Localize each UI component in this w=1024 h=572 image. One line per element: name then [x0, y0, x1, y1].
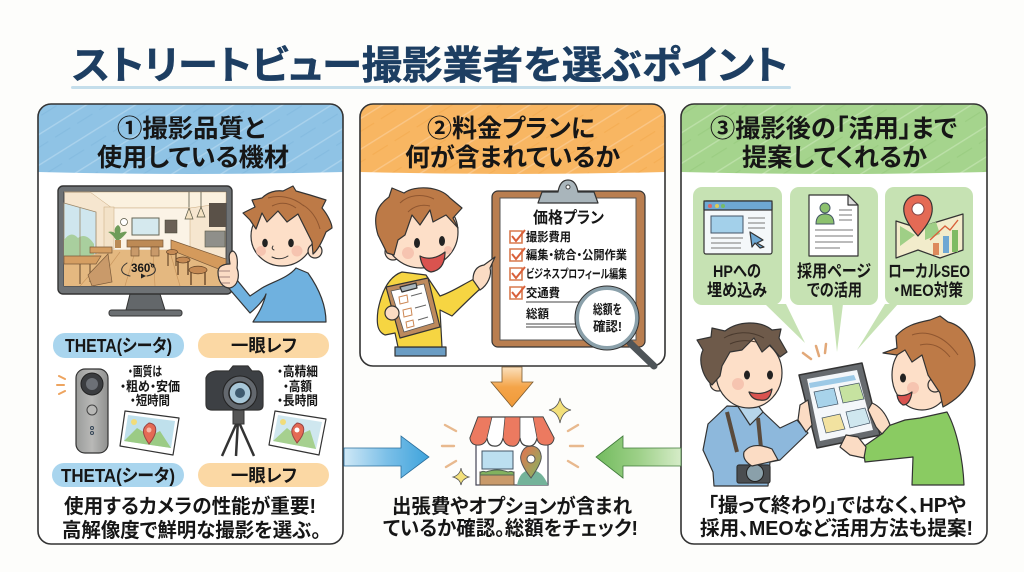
bubble: local SEO / MEO: ローカルSEO — [888, 262, 970, 281]
icon: store with map pin — [470, 417, 554, 485]
icon: browser — [704, 201, 772, 254]
header: panel 1: 使用している機材 — [97, 144, 289, 172]
icon: document — [809, 195, 858, 256]
tablet — [798, 363, 880, 448]
arrow: orange down — [491, 367, 533, 407]
caption: panel 1 — [62, 494, 321, 542]
price plan clipboard: 価格プラン — [533, 208, 605, 227]
header: panel 3: ③撮影後の「活用」まで — [710, 115, 957, 143]
price plan checklist: 撮影費用 — [526, 229, 571, 244]
icon: SLR on tripod — [206, 366, 263, 456]
price plan checklist: 交通費 — [526, 285, 560, 300]
caption: panel 2: ているか確認。総額をチェック! — [383, 517, 638, 540]
magnifier: confirm total: 総額を — [593, 302, 622, 317]
icon: photo with pin 2 — [269, 411, 326, 455]
header: panel 2: ②料金プランに — [427, 115, 595, 143]
sparkles and rays — [442, 398, 583, 485]
panel: 3 proposals — [681, 104, 987, 544]
monitor with 360 cafe view: 360° — [131, 261, 155, 275]
header: panel 1: ①撮影品質と — [117, 115, 265, 143]
caption: panel 3: 「撮って終わり」ではなく、HPや — [708, 494, 966, 517]
icon: photo with pin 1 — [120, 411, 179, 455]
SLR traits: ・長時間 — [277, 393, 318, 408]
THETA traits: ・粗め・安価 — [120, 379, 180, 394]
price plan clipboard — [492, 180, 645, 347]
magnifier: confirm total: 確認! — [593, 319, 622, 334]
caption: panel 3: 採用、MEOなど活用方法も提案! — [700, 517, 973, 540]
price plan clipboard: 総額 — [526, 306, 549, 321]
panel: 1 shooting quality and equipment — [38, 104, 343, 544]
label pill: SLR top: 一眼レフ — [231, 336, 297, 356]
bubble: HP embedding: 埋め込み — [707, 281, 767, 300]
caption: panel 2 — [383, 494, 638, 540]
arrow: green left — [596, 436, 681, 478]
label pill: SLR top — [198, 333, 329, 358]
bubble: HP embedding — [693, 187, 805, 343]
header: panel 2 — [360, 104, 665, 174]
caption: panel 1: 高解像度で鮮明な撮影を選ぶ。 — [62, 519, 321, 542]
THETA traits — [120, 364, 180, 408]
label pill: SLR bottom — [198, 463, 329, 487]
SLR traits — [277, 364, 318, 408]
icon: THETA camera — [57, 369, 108, 453]
emphasis ticks — [803, 344, 826, 359]
bubble: recruitment page: での活用 — [807, 281, 862, 300]
bubble: recruitment page: 採用ページ — [797, 262, 871, 281]
SLR traits: ・高精細 — [277, 364, 318, 379]
price plan checklist — [510, 229, 627, 300]
caption: panel 3 — [700, 494, 973, 540]
price plan checklist: 編集・統合・公開作業 — [526, 247, 627, 262]
header: panel 3 — [681, 104, 987, 174]
caption: panel 2: 出張費やオプションが含まれ — [392, 494, 632, 518]
THETA traits: ・画質は — [128, 364, 162, 379]
icon: map with pin and chart — [896, 195, 963, 258]
label pill: THETA top: THETA(シータ) — [65, 336, 172, 356]
header: panel 1 — [38, 104, 343, 174]
magnifier: confirm total — [575, 286, 654, 366]
caption: panel 1: 使用するカメラの性能が重要! — [64, 494, 316, 518]
label pill: THETA bottom: THETA(シータ) — [61, 466, 175, 486]
header: panel 2: 何が含まれているか — [405, 143, 620, 172]
title: ストリートビュー撮影業者を選ぶポイント — [72, 45, 788, 88]
client boy — [840, 316, 975, 485]
panel: 2 price plan — [360, 104, 665, 366]
bubble: local SEO / MEO: ・MEO対策 — [893, 280, 963, 300]
bubble: local SEO / MEO — [857, 187, 973, 350]
bubble: HP embedding: HPへの — [713, 262, 761, 281]
boy pointing with clipboard — [376, 188, 495, 356]
price plan checklist: ビジネスプロフィール編集 — [526, 266, 627, 281]
SLR traits: ・高額 — [283, 379, 312, 394]
monitor with 360 cafe view — [58, 186, 232, 316]
header: panel 3: 提案してくれるか — [742, 144, 927, 172]
THETA traits: ・短時間 — [130, 393, 170, 408]
boy with thumbs up — [218, 186, 332, 322]
label pill: SLR bottom: 一眼レフ — [231, 466, 297, 486]
arrow: blue right — [344, 436, 429, 478]
photographer man — [697, 323, 808, 486]
bubble: recruitment page — [790, 187, 878, 352]
